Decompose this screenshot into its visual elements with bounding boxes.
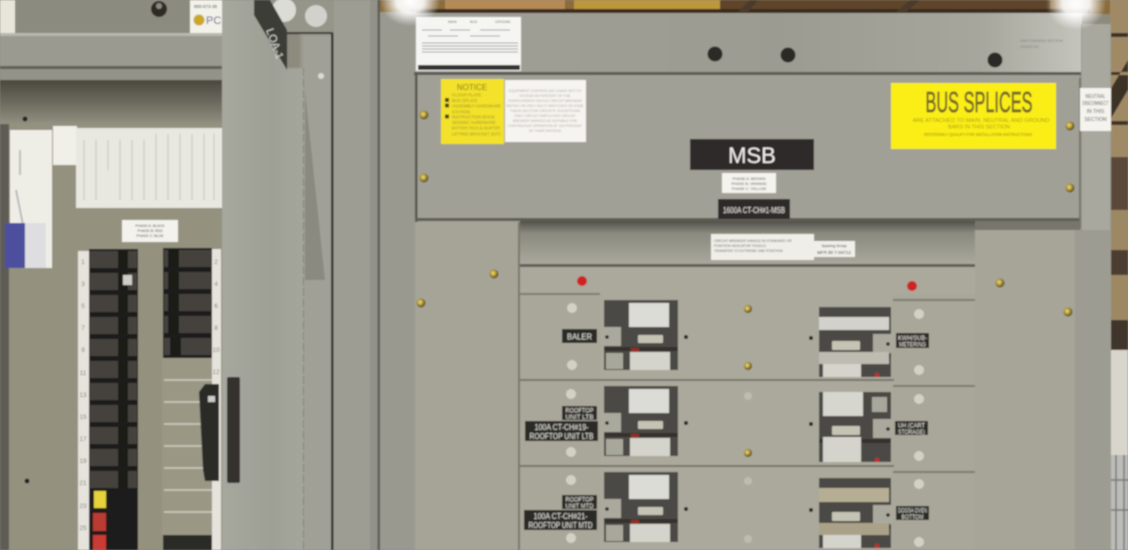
left panelboard cabinet bbox=[0, 0, 222, 550]
label: one-line diagram sheet: GROUND bbox=[495, 20, 511, 24]
label: KWH sub-metering: METERING bbox=[899, 342, 926, 348]
label: phase colours: PHASE C: BLUE bbox=[136, 234, 164, 238]
label: notice checklist: STATION bbox=[452, 110, 470, 114]
label: phase colours: PHASE A: BLACK bbox=[135, 224, 165, 228]
label: one-line diagram sheet: MAIN bbox=[448, 20, 457, 24]
glare: ceiling lights bbox=[380, 0, 1106, 30]
label: warning strip: Spacing Group bbox=[821, 244, 847, 248]
label: 100A CT-CH#19 bbox=[525, 421, 598, 441]
label: notice checklist: FLOOR PLATE bbox=[452, 92, 481, 98]
panel number strips: 19 bbox=[79, 458, 87, 465]
cabinet ledge bbox=[0, 33, 222, 80]
switchboard outer column bbox=[380, 12, 416, 550]
label: rooftop unit MTD: ROOFTOP bbox=[566, 496, 594, 504]
label: neutral disconnect bbox=[1080, 88, 1111, 131]
label: 100A CT-CH#21 bbox=[524, 510, 597, 530]
panel number strips: 23 bbox=[79, 503, 87, 510]
label: warning notice: EQUIPMENT CONTROLLED LOADS NOT TO bbox=[509, 89, 582, 93]
label: neutral disconnect: DISCONNECT bbox=[1082, 101, 1108, 107]
label: rooftop unit LTB: ROOFTOP bbox=[566, 408, 594, 414]
panel interior shadow bbox=[0, 80, 222, 124]
label: BALER bbox=[562, 329, 597, 343]
label: warning strip: CIRCUIT BREAKER HANDLE IN STANDARD OR bbox=[714, 239, 792, 243]
breaker row 2 bbox=[520, 379, 975, 466]
panel number strips: 1 bbox=[81, 259, 85, 266]
label: 100A CT-CH#21: ROOFTOP UNIT MTD bbox=[528, 521, 593, 530]
panel number strips: 4 bbox=[214, 281, 218, 288]
label: notice checklist: BUS SPLICE bbox=[452, 98, 477, 103]
switchboard upper panel bbox=[415, 74, 1081, 230]
panel number strips: 15 bbox=[79, 414, 87, 421]
label: rooftop unit LTB: UNIT LTB bbox=[566, 414, 594, 421]
label: notice checklist: LIFTING BRACKET (KIT) bbox=[452, 132, 501, 136]
panel number strips: 25 bbox=[79, 525, 87, 532]
panel number strips: 11 bbox=[80, 370, 87, 377]
nameplate: 1600A CT-CH#1-MSB bbox=[718, 199, 790, 219]
neutral disconnect column bbox=[1075, 24, 1111, 550]
panel number strips: 5 bbox=[81, 303, 85, 310]
switchboard top cover bbox=[414, 13, 1082, 75]
label: bus splices warning: BUS SPLICES bbox=[926, 87, 1032, 119]
panel number strips: 10 bbox=[212, 347, 220, 354]
label: notice checklist bbox=[441, 79, 504, 144]
label: DOGSA oven bottom: BOTTOM bbox=[902, 514, 924, 521]
breaker row 1 bbox=[520, 293, 975, 380]
panel number strips: 6 bbox=[214, 303, 218, 310]
label: notice checklist: SEISMIC HARDWARE bbox=[452, 120, 496, 125]
label: DOGSA oven bottom: DOGSA OVEN bbox=[898, 508, 927, 514]
panel number strips: 12 bbox=[212, 369, 220, 376]
label: rooftop unit LTB bbox=[562, 406, 597, 421]
label: neutral disconnect: IN THIS bbox=[1087, 109, 1105, 115]
label: 100A CT-CH#19: ROOFTOP UNIT LTB bbox=[530, 432, 594, 441]
right side of panel cabinet bbox=[270, 0, 380, 550]
cabinet top cover: 800-673-38 bbox=[194, 4, 218, 9]
label: notice checklist: BATTERY PACK & ADAPTER bbox=[452, 126, 500, 130]
label: warning strip: POSITION INDICATOR TOGGLE bbox=[714, 244, 767, 248]
icon: brass bolts bbox=[416, 110, 1074, 457]
lower side door: right bbox=[972, 230, 1075, 550]
breaker column: right bbox=[163, 248, 212, 358]
label: warning notice: THESE SECTION CIRCUITS. EXCEPTIONS bbox=[510, 109, 581, 113]
cabinet top cover bbox=[0, 0, 222, 33]
door nameplate: LOA-1 bbox=[263, 27, 285, 61]
door nameplate bbox=[254, 0, 287, 70]
label: KWH sub-metering: KWH/SUB- bbox=[898, 335, 927, 342]
panel number strips: 3 bbox=[81, 281, 85, 288]
nameplate: MSB: MSB bbox=[728, 143, 776, 168]
blank breaker fillers bbox=[162, 358, 212, 550]
icon: white push buttons bbox=[566, 303, 924, 547]
label: one-line diagram sheet bbox=[416, 17, 521, 71]
label: BALER: BALER bbox=[567, 332, 592, 342]
label: rooftop unit MTD bbox=[562, 495, 597, 510]
label: phase identification: PHASE A: BROWN bbox=[733, 177, 766, 181]
icon: red indicators bbox=[577, 276, 917, 291]
label: warning notice: RATING ON ONLY MULTI SWITCHES ON ZONE bbox=[507, 104, 584, 108]
label: UH cart storage: STORAGE) bbox=[898, 429, 925, 436]
label: manufacturer data: SWITCHBOARD SECTION bbox=[1020, 39, 1063, 43]
icon: silver bolts bbox=[744, 392, 752, 543]
open panel door bbox=[199, 0, 325, 550]
label: phase colours: PHASE B: RED bbox=[137, 229, 163, 233]
label: notice checklist: ASSEMBLY HARDWARE bbox=[452, 104, 501, 108]
label: UH cart storage bbox=[895, 421, 928, 436]
door latch bbox=[199, 377, 240, 483]
label: warning notice: OVERCURRENT DEVICE CIRCUIT BREAKER bbox=[508, 99, 582, 103]
label: neutral disconnect: SECTION bbox=[1084, 117, 1107, 123]
label: bus splices warning: ARE ATTACHED TO MAIN, NEUTRAL AND GROUND bbox=[912, 118, 1050, 124]
panel number strips: 7 bbox=[81, 325, 85, 332]
panel number strips: 2 bbox=[214, 259, 218, 266]
label: warning notice: EXCEED 80 PERCENT OF THE bbox=[520, 94, 571, 98]
label: 100A CT-CH#21: 100A CT-CH#21- bbox=[534, 512, 588, 521]
label: manufacturer data bbox=[1020, 39, 1063, 49]
cabinet top cover: PC bbox=[206, 15, 221, 27]
panel number strips: 8 bbox=[214, 325, 218, 332]
label: neutral disconnect: NEUTRAL bbox=[1086, 94, 1106, 100]
label: bus splices warning: BARS IN THIS SECTION bbox=[948, 124, 1010, 130]
label: rooftop unit MTD: UNIT MTD bbox=[566, 503, 594, 510]
label: warning notice: BREAKER MARKED AS SUITABLE FOR bbox=[513, 119, 578, 123]
panel number strips: 17 bbox=[79, 436, 87, 443]
panel number strips: 9 bbox=[81, 347, 85, 354]
label: DOGSA oven bottom bbox=[896, 506, 929, 521]
nameplate: MSB bbox=[690, 139, 814, 170]
breaker column: left bbox=[89, 249, 138, 550]
label: phase colours bbox=[122, 220, 178, 242]
label: wiring sheets bbox=[5, 126, 222, 268]
label: notice checklist: NOTICE bbox=[457, 83, 487, 92]
label: KWH sub-metering bbox=[896, 333, 929, 348]
background: warehouse ceiling bbox=[380, 0, 1128, 550]
label: warning notice: ONLY CIRCUIT EMPLOYING CIRCUIT bbox=[514, 114, 576, 118]
nameplate: 1600A CT-CH#1-MSB: 1600A CT-CH#1-MSB bbox=[723, 206, 785, 215]
label: warning strip: MFR 80 7-04712 bbox=[817, 250, 851, 255]
panel number strips: 21 bbox=[79, 480, 87, 487]
label: bus splices warning: REFER/ONLY QUALIFY FOR INSTALLATION INSTRUCTIONS bbox=[924, 132, 1032, 137]
label: notice checklist: INSTRUCTION BOOK bbox=[452, 114, 495, 120]
panel number strips: 13 bbox=[79, 392, 87, 399]
lower side door: left bbox=[415, 222, 521, 550]
label: one-line diagram sheet: BUS bbox=[470, 20, 478, 24]
label: manufacturer data: ORDER NO bbox=[1020, 45, 1039, 49]
breaker row 3 bbox=[520, 465, 975, 550]
panel number strips bbox=[78, 249, 221, 550]
label: warning notice bbox=[505, 80, 586, 142]
bus compartment cover bbox=[520, 221, 975, 295]
label: warning strip: TRANSFER TO EXTREME ONE POSITION bbox=[714, 249, 783, 253]
label: warning notice: OF THEIR RATINGS bbox=[529, 129, 562, 133]
label: warning strip bbox=[711, 234, 855, 260]
label: phase identification bbox=[722, 173, 776, 193]
label: 100A CT-CH#19: 100A CT-CH#19- bbox=[534, 423, 589, 432]
icon: knockout holes bbox=[708, 46, 1002, 68]
label: bus splices warning bbox=[891, 83, 1056, 149]
label: phase identification: PHASE B: ORANGE bbox=[731, 182, 767, 186]
label: UH cart storage: UH (CART bbox=[898, 422, 925, 430]
label: phase identification: PHASE C: YELLOW bbox=[732, 187, 767, 191]
label: warning notice: CONTINUOUS OPERATION AT 100 PERCENT bbox=[508, 124, 583, 128]
